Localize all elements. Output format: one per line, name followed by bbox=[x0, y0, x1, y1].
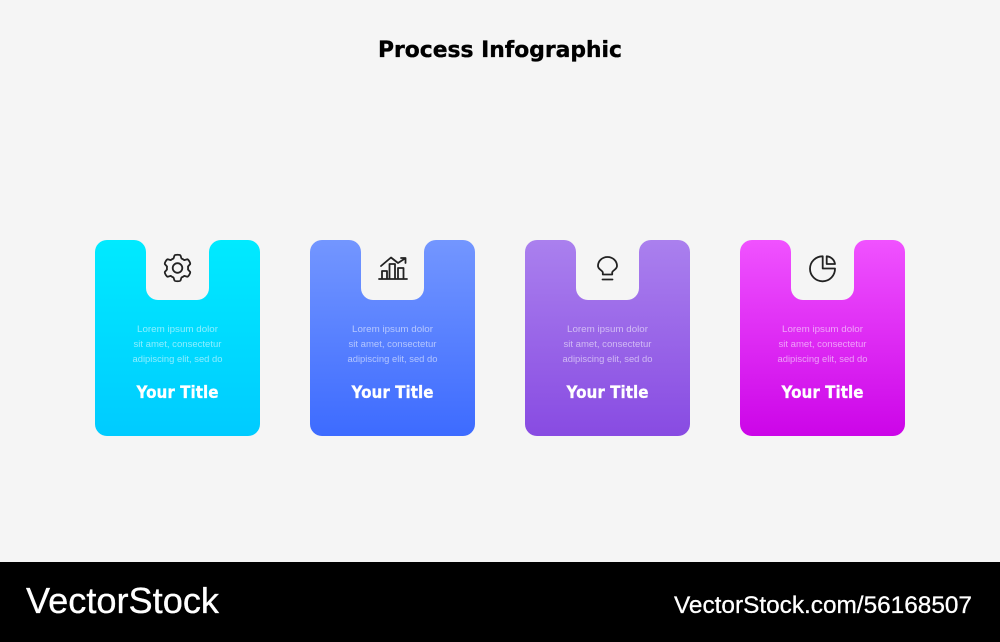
body text 2: Lorem ipsum dolor bbox=[352, 324, 433, 334]
icon: light bulb bbox=[598, 257, 617, 280]
body text 1: sit amet, consectetur bbox=[134, 339, 222, 349]
card title 3: Your Title bbox=[566, 383, 648, 402]
panel: step 2 bbox=[310, 240, 475, 436]
panel: step 1 bbox=[95, 240, 260, 436]
body text 3: adipiscing elit, sed do bbox=[562, 354, 652, 364]
body text 4: sit amet, consectetur bbox=[778, 339, 866, 349]
card shape 1 bbox=[95, 240, 260, 436]
footer bar bbox=[0, 562, 1000, 642]
icon: growth chart bbox=[379, 258, 407, 279]
body text 3 bbox=[562, 324, 652, 364]
panel: step 4 bbox=[740, 240, 905, 436]
body text 3: sit amet, consectetur bbox=[564, 339, 652, 349]
body text 2: adipiscing elit, sed do bbox=[348, 354, 438, 364]
title: Process Infographic bbox=[378, 37, 622, 63]
body text 4 bbox=[778, 324, 868, 364]
body text 4: adipiscing elit, sed do bbox=[778, 354, 868, 364]
body text 3: Lorem ipsum dolor bbox=[567, 324, 648, 334]
card shape 4 bbox=[740, 240, 905, 436]
footer logo: VectorStock bbox=[26, 580, 220, 621]
card title 2: Your Title bbox=[351, 383, 434, 402]
body text 2 bbox=[348, 324, 438, 364]
body text 1: Lorem ipsum dolor bbox=[137, 324, 218, 334]
icon: gear bbox=[165, 255, 190, 281]
panel: step 3 bbox=[525, 240, 690, 436]
icon: pie chart bbox=[810, 256, 835, 281]
footer url: VectorStock.com/56168507 bbox=[674, 592, 972, 619]
card title 1: Your Title bbox=[136, 383, 218, 402]
body text 1: adipiscing elit, sed do bbox=[132, 354, 222, 364]
body text 1 bbox=[132, 324, 222, 364]
card shape 3 bbox=[525, 240, 690, 436]
body text 2: sit amet, consectetur bbox=[348, 339, 436, 349]
body text 4: Lorem ipsum dolor bbox=[782, 324, 863, 334]
card title 4: Your Title bbox=[781, 383, 864, 402]
card shape 2 bbox=[310, 240, 475, 436]
